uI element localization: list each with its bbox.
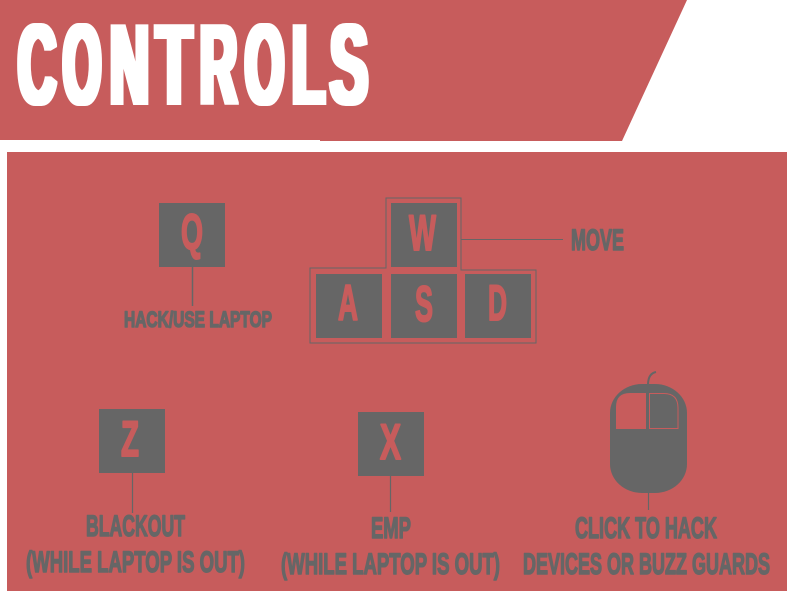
- keys: WASD: D: [488, 275, 507, 331]
- keys: WASD: S: [415, 276, 433, 332]
- title: T: [156, 2, 192, 129]
- title: C: [18, 2, 56, 129]
- key: Z: [99, 409, 165, 513]
- keys: WASD: A: [338, 275, 358, 331]
- key: Q: [159, 203, 225, 306]
- label: blackout: [26, 510, 245, 579]
- header banner: [0, 0, 687, 141]
- label: click to hack: [523, 512, 770, 581]
- key: Q: Q: [181, 204, 203, 260]
- title: R: [200, 2, 237, 129]
- label: hack/use laptop: HACK/USE LAPTOP: [124, 307, 272, 332]
- label: move: MOVE: [571, 224, 624, 257]
- key: Z: Z: [121, 411, 139, 467]
- label: blackout: (WHILE LAPTOP IS OUT): [26, 546, 245, 579]
- key: X: [358, 412, 424, 512]
- key: X: X: [380, 414, 401, 470]
- title: O: [63, 2, 101, 129]
- title: L: [292, 2, 325, 129]
- panel: controls: [7, 152, 787, 591]
- label: emp: (WHILE LAPTOP IS OUT): [281, 548, 500, 581]
- title: N: [110, 2, 149, 129]
- text: S: [330, 2, 368, 129]
- label: blackout: BLACKOUT: [86, 510, 185, 543]
- keys: WASD: [310, 198, 563, 343]
- label: emp: EMP: [371, 512, 411, 545]
- keys: WASD: W: [409, 205, 436, 261]
- icon: mouse: [610, 372, 687, 510]
- title: O: [245, 2, 284, 129]
- label: emp: [281, 512, 500, 581]
